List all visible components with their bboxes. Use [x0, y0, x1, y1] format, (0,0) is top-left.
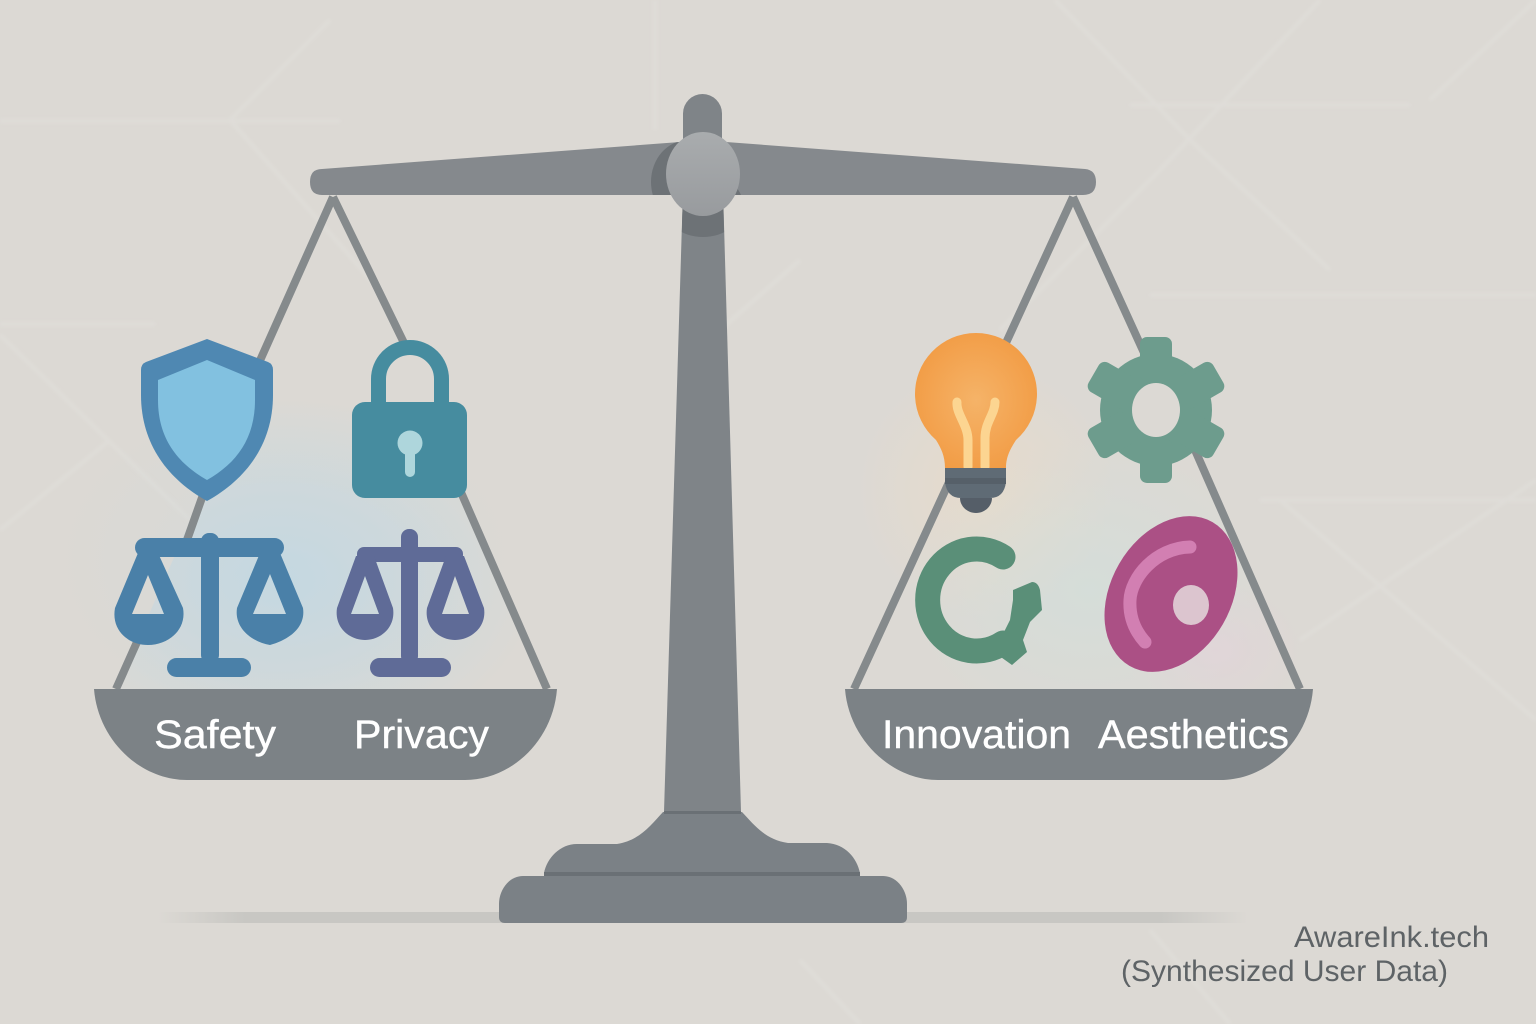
right pan	[845, 689, 1313, 780]
beam	[310, 142, 1096, 195]
icon: indigo scales	[337, 529, 484, 677]
glow: bulb	[855, 360, 1115, 620]
right cords	[854, 197, 1300, 689]
icon: green ring	[928, 549, 1042, 665]
hub	[666, 132, 740, 216]
glow: left pan	[135, 447, 472, 689]
base lower tier	[499, 876, 907, 923]
glow: pink area	[1125, 580, 1305, 720]
icon: shield	[141, 339, 273, 501]
left pan	[94, 689, 557, 780]
label: Privacy: Privacy	[354, 713, 489, 757]
post top	[683, 94, 722, 150]
icon: light bulb	[915, 333, 1037, 513]
label: Safety: Safety	[154, 713, 276, 757]
credit text: AwareInk.tech	[1294, 921, 1489, 954]
pillar	[664, 190, 741, 812]
icon: gear	[1085, 337, 1227, 483]
icon: blue scales	[114, 533, 303, 677]
glow: gear area	[900, 440, 1280, 740]
scale stand	[499, 94, 907, 923]
left cords	[116, 197, 547, 689]
base upper tier	[544, 812, 860, 876]
ground shadow	[158, 912, 1248, 923]
hub shadow	[651, 140, 743, 237]
credit text	[1121, 921, 1489, 988]
label: Aesthetics: Aesthetics	[1098, 713, 1289, 757]
credit text: (Synthesized User Data)	[1121, 955, 1448, 988]
icon: padlock	[352, 348, 467, 498]
label: Innovation: Innovation	[882, 713, 1071, 757]
icon: pink palette	[1078, 492, 1264, 696]
